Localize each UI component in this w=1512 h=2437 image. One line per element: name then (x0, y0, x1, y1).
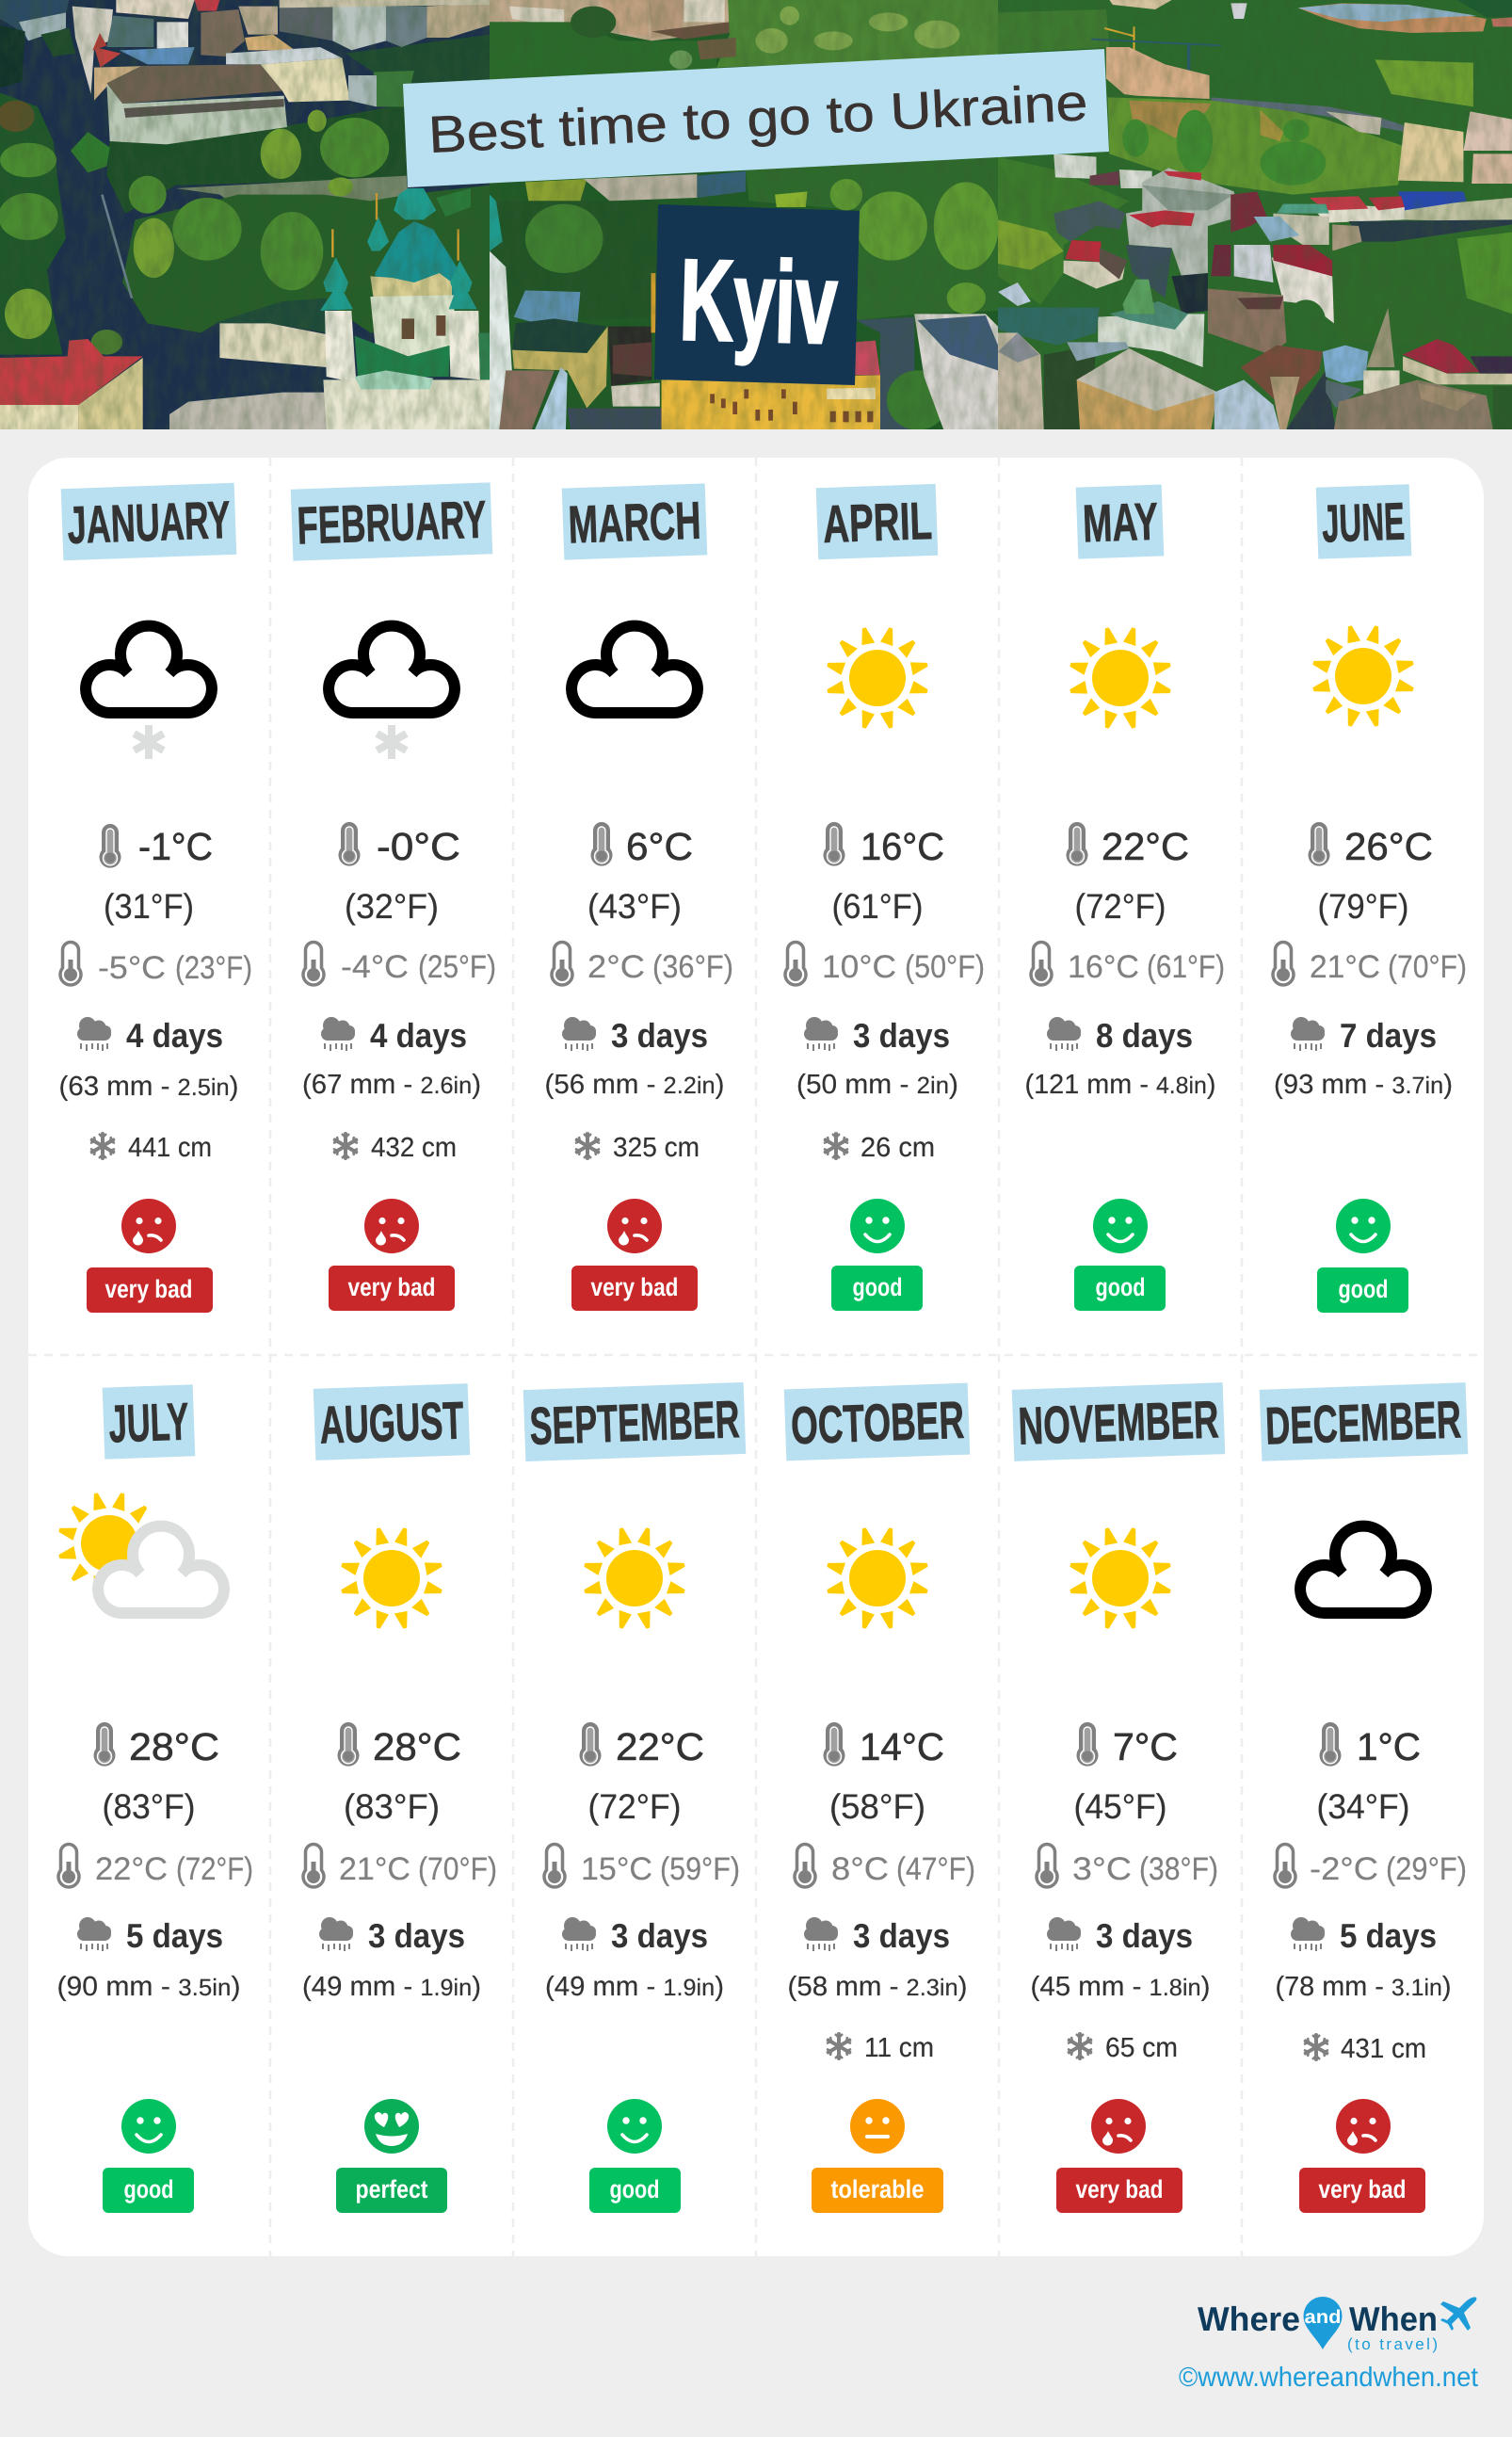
panel: October (784, 1383, 975, 2213)
rainy days: 7 days (1340, 1016, 1437, 1055)
icon: neutral face (850, 2099, 905, 2154)
icon: thermometer low (544, 1844, 565, 1887)
icon: thermometer (823, 822, 845, 866)
rating: very bad: very bad (105, 1275, 192, 1303)
panel: December (1260, 1382, 1468, 2213)
icon: thermometer (1066, 822, 1088, 866)
panel: March (544, 483, 733, 1311)
icon: rain cloud (804, 1017, 838, 1051)
icon: thermometer (1077, 1722, 1098, 1767)
logo: Where and When to travel: When (1349, 2300, 1438, 2338)
month label (562, 483, 707, 560)
high Fahrenheit: (72°F) (1075, 887, 1166, 926)
icon: rain cloud (1291, 1917, 1325, 1951)
rainfall: (78 mm - 3.1in) (1275, 1972, 1452, 2002)
average low: 8°C (831, 1851, 889, 1887)
month label: FEBRUARY (296, 490, 488, 555)
average low: -5°C (98, 950, 166, 986)
average low: -4°C (341, 949, 409, 985)
icon: sun (1069, 626, 1172, 730)
average high: 7°C (1113, 1725, 1178, 1768)
icon: airplane (1440, 2297, 1476, 2331)
copyright url: ©www.whereandwhen.net (1179, 2363, 1478, 2393)
rainy days: 3 days (611, 1016, 708, 1055)
rainy days: 3 days (611, 1916, 708, 1955)
icon: thermometer low (1273, 942, 1294, 985)
icon: crying face (607, 1199, 662, 1253)
icon: rain cloud (562, 1017, 596, 1051)
snowfall: 441 cm (128, 1133, 212, 1163)
icon: snowflake (333, 1134, 358, 1158)
high Fahrenheit: (43°F) (587, 887, 682, 926)
city name: Kyiv (654, 204, 860, 385)
month label (103, 1384, 195, 1460)
icon: thermometer low (795, 1844, 815, 1887)
average low: (61°F) (1147, 949, 1225, 985)
panel: February (291, 482, 496, 1311)
rainfall: (56 mm - 2.2in) (544, 1070, 725, 1100)
icon: rain cloud (1291, 1017, 1325, 1051)
icon: rain cloud (804, 1917, 838, 1951)
icon: smiling face (1093, 1199, 1148, 1253)
rainfall: (45 mm - 1.8in) (1030, 1972, 1211, 2002)
average high: -0°C (377, 825, 460, 868)
rating: very bad: very bad (591, 1273, 678, 1301)
month label: AUGUST (318, 1390, 465, 1455)
icon: smiling face (1336, 1199, 1391, 1253)
hero photo: aerial view of Kyiv (0, 0, 1512, 430)
icon: thermometer (339, 822, 360, 866)
rating: perfect (336, 2168, 447, 2213)
average low: 3°C (1072, 1851, 1132, 1887)
rating: very bad: very bad (348, 1273, 435, 1301)
rating: good: good (853, 1273, 902, 1301)
average high: 22°C (616, 1725, 704, 1768)
month label (1012, 1382, 1225, 1461)
high Fahrenheit: (61°F) (832, 887, 923, 926)
rainy days: 3 days (368, 1916, 465, 1955)
rating: good (589, 2168, 681, 2213)
high Fahrenheit: (58°F) (829, 1787, 925, 1826)
average low: 22°C (95, 1851, 168, 1887)
icon: snowflake (1068, 2034, 1092, 2058)
icon: thermometer (591, 822, 612, 866)
average low: 15°C (581, 1851, 652, 1887)
icon: rain cloud (319, 1917, 353, 1951)
icon: snowflake (827, 2034, 851, 2058)
icon: sun (1311, 624, 1415, 728)
panel: June (1273, 484, 1467, 1313)
average high: 16°C (861, 825, 944, 868)
panel: November (1012, 1382, 1225, 2213)
snowfall: 65 cm (1105, 2033, 1178, 2063)
panel: July (56, 1384, 253, 2213)
month label (291, 482, 492, 561)
average high: 22°C (1102, 825, 1189, 868)
average low: (72°F) (176, 1851, 253, 1887)
month label (314, 1383, 470, 1461)
high Fahrenheit: (79°F) (1318, 887, 1408, 926)
high Fahrenheit: (83°F) (102, 1787, 196, 1826)
rating: good (831, 1266, 923, 1311)
rating: tolerable: tolerable (830, 2175, 925, 2203)
icon: smiling face (121, 2099, 176, 2154)
average high: 14°C (860, 1725, 944, 1768)
rainfall: (58 mm - 2.3in) (787, 1972, 968, 2002)
month label (1316, 484, 1411, 559)
icon: smiling face (607, 2099, 662, 2154)
rating: good: good (610, 2175, 659, 2203)
title banner: Best time to go to Ukraine (427, 73, 1089, 164)
month label (816, 484, 938, 559)
rainfall: (49 mm - 1.9in) (302, 1972, 481, 2002)
average high: 6°C (626, 825, 693, 868)
average low: (23°F) (175, 950, 252, 986)
month label: APRIL (822, 491, 933, 554)
rainfall: (49 mm - 1.9in) (545, 1972, 724, 2002)
rainy days: 5 days (126, 1916, 223, 1955)
average low: (59°F) (660, 1851, 740, 1887)
main white card (28, 458, 1484, 2256)
average low: (47°F) (896, 1851, 975, 1887)
icon: sun (583, 1526, 686, 1630)
icon: rain cloud (77, 1917, 111, 1951)
rainfall: (63 mm - 2.5in) (58, 1072, 238, 1102)
month label (784, 1383, 970, 1461)
icon: thermometer low (1275, 1844, 1295, 1887)
rainy days: 4 days (370, 1016, 467, 1055)
icon: sun (826, 626, 929, 730)
icon: sun (1069, 1526, 1172, 1630)
month label (61, 483, 236, 560)
icon: thermometer (823, 1722, 845, 1767)
rainy days: 5 days (1340, 1916, 1437, 1955)
average low: (36°F) (652, 949, 733, 985)
rainy days: 8 days (1096, 1016, 1193, 1055)
month label: JANUARY (66, 490, 232, 555)
high Fahrenheit: (34°F) (1316, 1787, 1410, 1826)
snowfall: 432 cm (371, 1133, 457, 1163)
high Fahrenheit: (45°F) (1073, 1787, 1167, 1826)
city name: Kyiv: Kyiv (678, 235, 839, 367)
month label: OCTOBER (790, 1390, 965, 1455)
icon: snowflake (824, 1134, 848, 1158)
average low: 10°C (822, 949, 896, 985)
month label (523, 1382, 746, 1461)
rainfall: (93 mm - 3.7in) (1274, 1070, 1453, 1100)
icon: rain cloud (1047, 1917, 1081, 1951)
rating: very bad (1299, 2168, 1425, 2213)
icon: sun (826, 1526, 929, 1630)
month label (1076, 484, 1164, 559)
snowfall: 325 cm (613, 1133, 700, 1163)
rainfall: (90 mm - 3.5in) (56, 1972, 241, 2002)
month label: MARCH (567, 491, 702, 554)
icon: rain cloud (77, 1017, 111, 1051)
icon: thermometer (1309, 822, 1329, 866)
rating: very bad: very bad (1075, 2175, 1164, 2203)
icon: smiling face (850, 1199, 905, 1253)
average low: (29°F) (1386, 1851, 1467, 1887)
icon: crying face (1336, 2099, 1391, 2154)
icon: cloud with snow (329, 626, 455, 759)
icon: thermometer low (785, 942, 806, 985)
icon: rain cloud (1047, 1017, 1081, 1051)
logo: Where and When to travel: Where (1198, 2300, 1300, 2338)
rainy days: 3 days (853, 1916, 950, 1955)
rainfall: (121 mm - 4.8in) (1024, 1070, 1216, 1100)
icon: snowflake (1304, 2035, 1328, 2059)
icon: cloud (571, 626, 698, 713)
snowfall: 11 cm (864, 2033, 934, 2063)
snowfall: 26 cm (861, 1133, 935, 1163)
icon: crying face (1091, 2099, 1146, 2154)
panel: September (523, 1382, 746, 2213)
rainy days: 3 days (853, 1016, 950, 1055)
average low: 21°C (339, 1851, 410, 1887)
average low: (70°F) (418, 1851, 497, 1887)
icon: thermometer (100, 824, 121, 868)
average low: (25°F) (418, 949, 496, 985)
rating: very bad (329, 1266, 455, 1311)
rainy days: 4 days (126, 1016, 223, 1055)
icon: map pin: and (1305, 2307, 1341, 2328)
icon: sun behind cloud (57, 1492, 224, 1613)
average low: (38°F) (1139, 1851, 1218, 1887)
panel: April (785, 484, 985, 1311)
average high: 26°C (1344, 825, 1433, 868)
average low: 16°C (1068, 949, 1139, 985)
average low: (70°F) (1388, 949, 1467, 985)
icon: thermometer (1320, 1722, 1341, 1767)
icon: map pin (1303, 2297, 1343, 2349)
icon: thermometer low (58, 1844, 79, 1887)
icon: thermometer low (552, 942, 572, 985)
high Fahrenheit: (72°F) (587, 1787, 682, 1826)
icon: thermometer (94, 1722, 115, 1767)
rating: very bad (87, 1267, 213, 1313)
logo: Where and When to travel (1198, 2297, 1476, 2353)
icon: crying face (364, 1199, 419, 1253)
average low: 2°C (587, 949, 645, 985)
panel: January (58, 483, 252, 1313)
month label: JUNE (1321, 491, 1406, 554)
icon: heart-eyes face (364, 2099, 419, 2154)
average low: 21°C (1310, 949, 1380, 985)
month label: JULY (107, 1392, 190, 1453)
rating: very bad (571, 1266, 698, 1311)
icon: thermometer low (303, 1844, 324, 1887)
month label: SEPTEMBER (528, 1389, 741, 1456)
average high: -1°C (138, 825, 213, 868)
logo: Where and When to travel: (to travel) (1347, 2335, 1438, 2353)
icon: snowflake (575, 1134, 600, 1158)
rating: perfect: perfect (356, 2175, 428, 2203)
panel: May (1024, 484, 1225, 1311)
icon: snowflake (90, 1134, 115, 1158)
icon: cloud with snow (86, 626, 212, 759)
icon: thermometer low (1037, 1844, 1057, 1887)
icon: rain cloud (562, 1917, 596, 1951)
panel: August (302, 1383, 497, 2213)
icon: thermometer (337, 1722, 360, 1767)
average high: 28°C (373, 1725, 461, 1768)
high Fahrenheit: (31°F) (104, 887, 194, 926)
rating: very bad: very bad (1318, 2175, 1407, 2203)
average low: (50°F) (905, 949, 985, 985)
average high: 1°C (1357, 1725, 1421, 1768)
rainfall: (50 mm - 2in) (796, 1070, 958, 1100)
snowfall: 431 cm (1341, 2034, 1426, 2064)
rating: good (1317, 1267, 1408, 1313)
icon: thermometer low (60, 942, 81, 985)
average low: -2°C (1310, 1851, 1378, 1887)
rating: good: good (124, 2175, 173, 2203)
rating: tolerable (812, 2168, 943, 2213)
rating: good: good (1339, 1275, 1388, 1303)
icon: thermometer low (1031, 942, 1052, 985)
rainy days: 3 days (1096, 1916, 1193, 1955)
rainfall: (67 mm - 2.6in) (302, 1070, 481, 1100)
average high: 28°C (129, 1725, 219, 1768)
high Fahrenheit: (32°F) (345, 887, 439, 926)
icon: sun (340, 1526, 443, 1630)
rating: good (1074, 1266, 1166, 1311)
rating: good (103, 2168, 194, 2213)
icon: thermometer (580, 1722, 601, 1767)
icon: crying face (121, 1199, 176, 1253)
title banner (403, 49, 1109, 187)
icon: rain cloud (321, 1017, 355, 1051)
high Fahrenheit: (83°F) (344, 1787, 440, 1826)
rating: very bad (1056, 2168, 1182, 2213)
rating: good: good (1096, 1273, 1145, 1301)
month label: MAY (1082, 492, 1159, 553)
icon: thermometer low (303, 942, 324, 985)
month label: NOVEMBER (1017, 1389, 1220, 1456)
icon: cloud (1300, 1526, 1426, 1613)
